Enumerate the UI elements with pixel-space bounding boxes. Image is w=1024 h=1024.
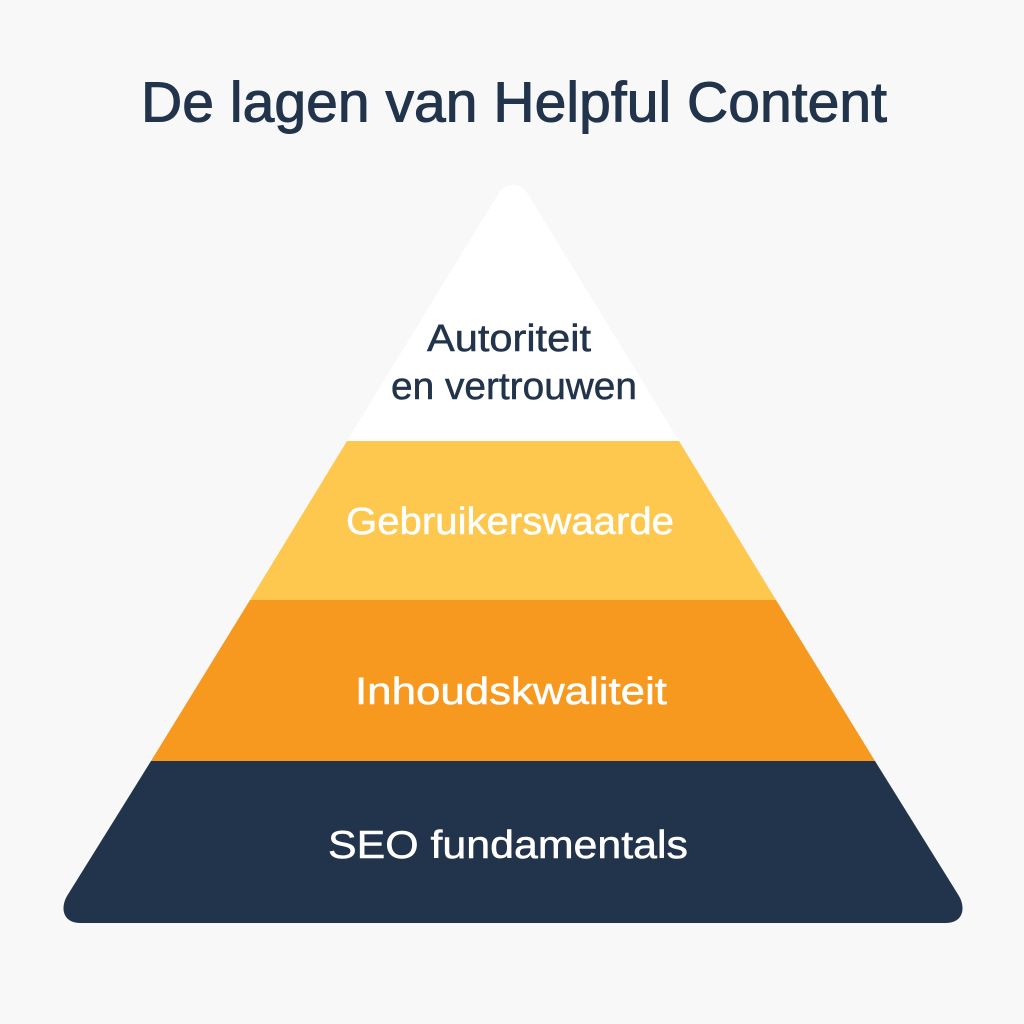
layer: Autoriteit en vertrouwen: en vertrouwen <box>391 366 637 408</box>
layer: Inhoudskwaliteit <box>151 600 875 761</box>
layer: Gebruikerswaarde: Gebruikerswaarde <box>346 501 674 543</box>
layer: SEO fundamentals <box>63 761 963 923</box>
layer: Autoriteit en vertrouwen: Autoriteit <box>427 318 591 360</box>
layer: Inhoudskwaliteit: Inhoudskwaliteit <box>355 671 667 713</box>
pyramid <box>63 185 963 923</box>
layer: SEO fundamentals: SEO fundamentals <box>328 824 688 867</box>
layer: Autoriteit en vertrouwen <box>347 185 679 441</box>
title: De lagen van Helpful Content <box>141 70 887 134</box>
layer: Gebruikerswaarde <box>250 441 776 600</box>
